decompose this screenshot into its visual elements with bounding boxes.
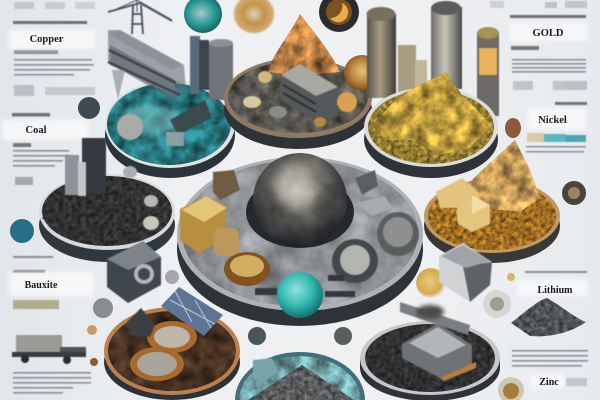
icon: white pebbles: [123, 166, 159, 230]
icon: cylinder steel: [431, 1, 462, 89]
panel: cylinders: [366, 1, 499, 116]
icon: truck: [12, 335, 86, 364]
panel: central disk: [177, 153, 423, 326]
label: Copper: Copper: [30, 34, 64, 45]
panel: gold disk: [364, 72, 498, 178]
label: Nickel: Nickel: [538, 115, 567, 126]
icon: ore chunk: [213, 170, 240, 200]
icon: copper orb: [344, 55, 380, 91]
icon: gold sphere: [416, 268, 446, 298]
panel: nickel disk: [424, 140, 560, 263]
icon: gold mound: [372, 72, 492, 155]
panel: copper mine disk: [105, 0, 235, 178]
panel: bauxite disk: [104, 287, 240, 400]
icon: lithium pile: [511, 298, 586, 336]
icon: teal gem: [277, 272, 323, 318]
icon: dark pillars: [190, 36, 233, 100]
icon: conveyor: [400, 302, 470, 335]
icon: coal mound: [42, 182, 142, 244]
panel: small print left: [12, 2, 95, 394]
icon: machine block: [402, 323, 476, 381]
label: Coal: Coal: [26, 125, 47, 136]
icon: copper mound: [268, 14, 340, 76]
label: Bauxite: Bauxite: [25, 280, 58, 291]
icon: small tube: [398, 45, 427, 95]
icon: metal block: [281, 64, 338, 122]
panel: silver ore disk: [224, 0, 380, 149]
icon: copper swirl: [233, 0, 275, 34]
panel: zinc disk: [360, 268, 500, 400]
icon: crane tower: [108, 0, 172, 34]
icon: gold bars: [180, 196, 227, 254]
icon: silver coin: [332, 239, 378, 283]
icon: ring two: [130, 347, 184, 381]
icon: dark flakes: [255, 275, 355, 297]
icon: solar panel: [161, 287, 223, 336]
icon: dark towers: [65, 138, 106, 196]
icon: gold crystals: [436, 178, 490, 232]
icon: gold bowl: [224, 252, 270, 286]
icon: grey cube: [107, 241, 161, 303]
icon: crates: [166, 100, 212, 146]
label: GOLD: GOLD: [533, 28, 564, 39]
icon: metal chunks: [355, 170, 392, 216]
icon: cylinder bronze: [366, 7, 396, 98]
icon: gold nugget: [214, 228, 239, 256]
panel: bottom teal disk: [235, 352, 365, 400]
icon: coin: [319, 0, 359, 32]
icon: cylinder lamp: [477, 27, 499, 116]
icon: nuggets: [243, 71, 357, 127]
icon: silver cube: [439, 243, 492, 302]
label: Lithium: Lithium: [537, 285, 573, 296]
panel: coal disk: [39, 138, 175, 262]
icon: silver medallion: [377, 212, 419, 256]
icon: ore sphere: [117, 114, 143, 140]
icon: dark block: [127, 308, 155, 337]
icon: grey pile: [248, 365, 354, 400]
icon: mine scaffold: [108, 30, 186, 100]
label: Zinc: Zinc: [539, 377, 559, 388]
icon: globe base: [246, 176, 354, 248]
icon: central globe: [253, 153, 347, 247]
icon: side spheres: [10, 97, 586, 400]
icon: small block: [253, 358, 279, 382]
icon: ring one: [147, 321, 197, 353]
icon: globe: [184, 0, 222, 33]
panel: small print right: [490, 1, 588, 386]
icon: gold nickel mound: [462, 140, 540, 212]
